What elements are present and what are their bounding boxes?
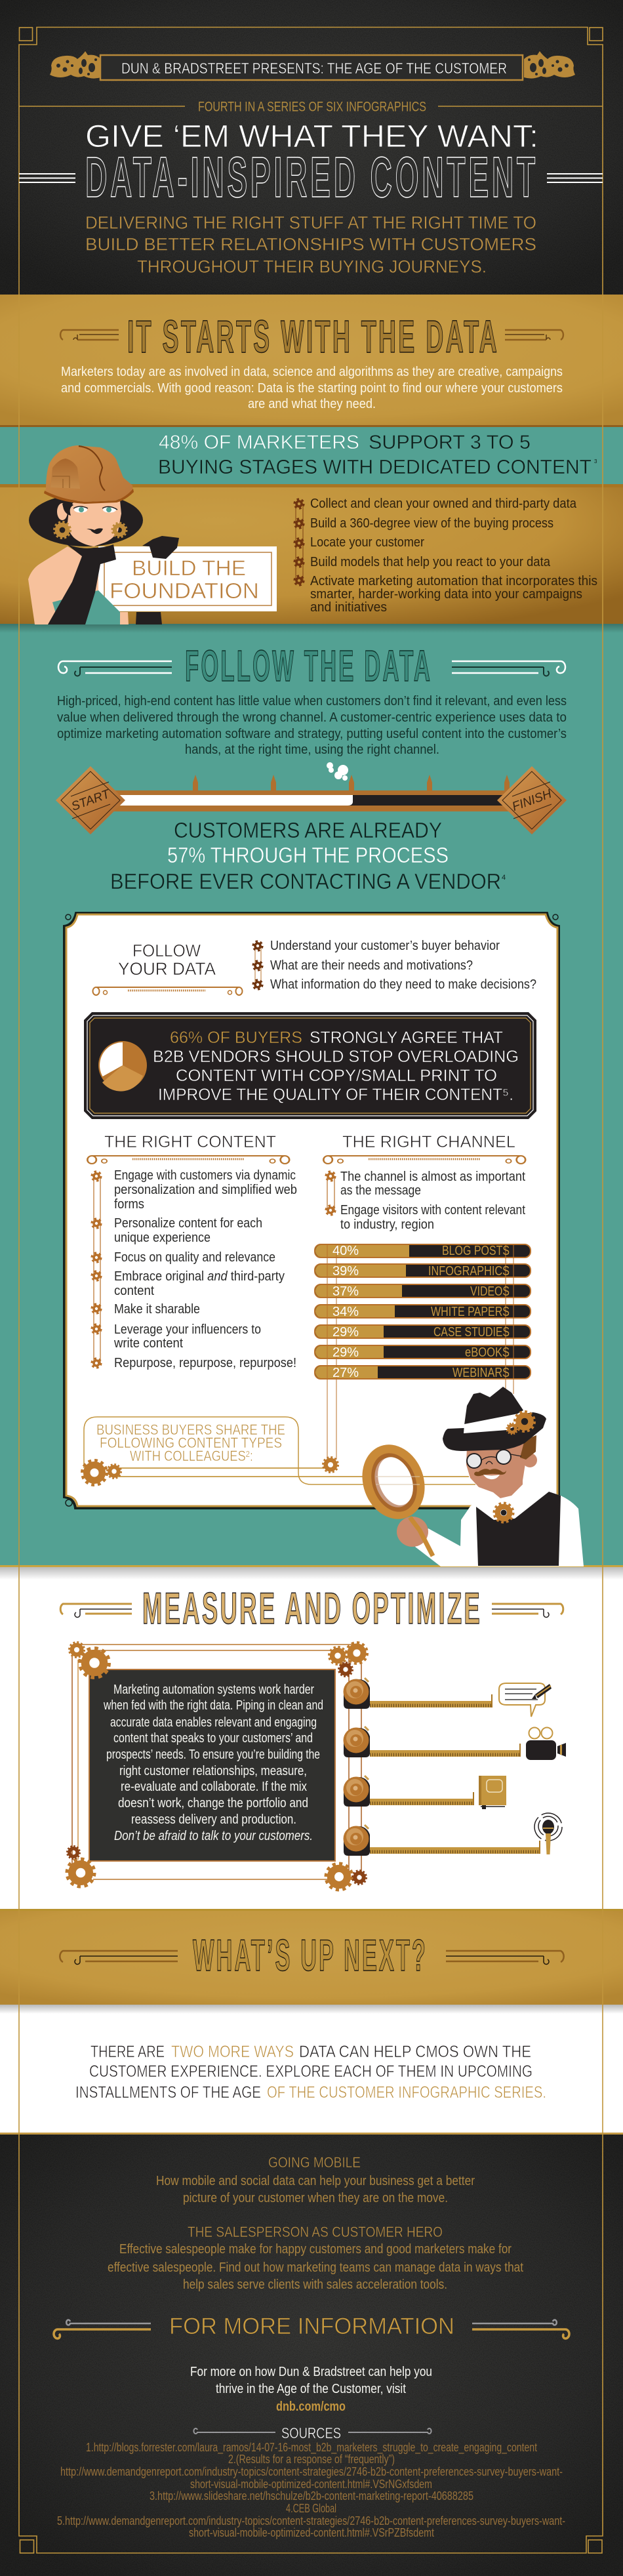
- banner ornament left: [50, 51, 101, 79]
- follow your data list: What are their needs and motivations?: [270, 958, 473, 973]
- hard hat: [44, 445, 134, 504]
- heading: for more information: [54, 2314, 569, 2339]
- progress track: start to finish: [56, 762, 567, 834]
- smoke puffs: [327, 762, 348, 781]
- pie chart: 66%: [98, 1041, 147, 1092]
- heading: sources: [193, 2424, 432, 2442]
- checklist: foundation steps: Locate your customer: [310, 535, 424, 550]
- blackboard text: accurate data enables relevant and engaging: [110, 1715, 317, 1730]
- finish diamond: FINISH: [510, 787, 553, 814]
- callout: business buyers share: WITH COLLEAGUES²:: [130, 1448, 253, 1464]
- connector lines: [327, 1244, 513, 1460]
- checklist: foundation steps: Activate marketing automation that incorporates this: [310, 574, 597, 588]
- upcoming: salesperson as customer hero: effective salespeople. Find out how marketing teams can manage data in ways that: [108, 2260, 523, 2275]
- intro text: Marketers today are as involved in data, science and algorithms as they are creative, campaigns: [61, 365, 563, 379]
- icon: speech bubble with pencil: [499, 1683, 552, 1717]
- column: the right channel: to industry, region: [340, 1217, 434, 1232]
- teaser text: INSTALLMENTS OF THE AGE: [75, 2083, 261, 2102]
- blackboard text: content that speaks to your customers’ and: [113, 1731, 313, 1746]
- callout: business buyers share: [83, 1417, 475, 1484]
- stat: 57% through the process: CUSTOMERS ARE ALREADY: [174, 818, 442, 842]
- heading scrolls: [60, 1604, 132, 1617]
- bar chart: content types shared: CASE STUDIES: [433, 1325, 510, 1339]
- sign: build the foundation: BUILD THE: [132, 556, 246, 580]
- start diamond: [56, 766, 125, 834]
- source list: [57, 2441, 565, 2539]
- stat: 48% of marketers: SUPPORT 3 TO 5: [369, 432, 531, 453]
- follow your data heading: FOLLOW: [132, 941, 201, 960]
- bar chart: content types shared: VIDEOS: [470, 1284, 510, 1299]
- sign: build the foundation: [98, 546, 277, 611]
- column: the right content: forms: [114, 1197, 144, 1212]
- eyes and lips: [73, 506, 117, 534]
- source list: 2.(Results for a response of “frequently”): [228, 2453, 395, 2466]
- title banner: [50, 51, 575, 80]
- illustration: woman with hard hat: [28, 445, 179, 624]
- bar chart: content types shared: WHITE PAPERS: [431, 1305, 510, 1319]
- blackboard: [89, 1669, 335, 1861]
- follow your data heading: [93, 941, 243, 995]
- source list: 3.http://www.slideshare.net/hschulze/b2b-content-marketing-report-40688285: [150, 2489, 473, 2503]
- column: the right channel: [323, 1133, 525, 1232]
- bar chart: content types shared: 40%: [332, 1244, 359, 1258]
- title banner: DUN & BRADSTREET PRESENTS: THE AGE OF THE CUSTOMER: [121, 60, 507, 77]
- frame gears: [68, 1643, 367, 1889]
- subtitle: THROUGHOUT THEIR BUYING JOURNEYS.: [137, 257, 487, 277]
- corner curls: [66, 914, 558, 1506]
- section: measure and optimize: [60, 1584, 566, 1889]
- column: the right content: [87, 1133, 297, 1370]
- more information text: For more on how Dun & Bradstreet can help you: [190, 2365, 432, 2379]
- column: the right channel: Engage visitors with content relevant: [340, 1203, 525, 1217]
- subtitle: BUILD BETTER RELATIONSHIPS WITH CUSTOMERS: [85, 235, 536, 255]
- teaser text: DATA CAN HELP CMOS OWN THE: [299, 2043, 531, 2061]
- bar chart: content types shared: eBOOKS: [465, 1345, 510, 1360]
- finish diamond: [497, 766, 567, 834]
- callout: 66% of buyers: [84, 1012, 536, 1119]
- intro text: [61, 365, 563, 411]
- intro text: [57, 694, 567, 757]
- column: the right content: Make it sharable: [114, 1302, 200, 1317]
- subtitle: DELIVERING THE RIGHT STUFF AT THE RIGHT TIME TO: [85, 213, 536, 232]
- blackboard text: doesn’t work, change the portfolio and: [118, 1796, 308, 1810]
- callout: 66% of buyers: IMPROVE THE QUALITY OF THEIR CONTENT⁵.: [158, 1086, 513, 1104]
- hat: [443, 1387, 546, 1451]
- subtitle: [85, 213, 536, 277]
- blackboard text: prospects’ needs. To ensure you’re building the: [106, 1748, 320, 1762]
- icon: film camera: [526, 1728, 566, 1760]
- bar chart: content types shared: 39%: [332, 1264, 359, 1278]
- checklist: foundation steps: Build a 360-degree view of the buying process: [310, 516, 553, 531]
- blackboard text: Marketing automation systems work harder: [113, 1683, 314, 1697]
- intro text: High-priced, high-end content has little value when customers don’t find it relevant, and even less: [57, 694, 567, 708]
- black mitten hand: [142, 536, 179, 559]
- blackboard text: Don’t be afraid to talk to your customers.: [114, 1829, 313, 1843]
- heading: for more information: FOR MORE INFORMATION: [169, 2314, 454, 2339]
- bar chart: content types shared: BLOG POSTS: [442, 1244, 510, 1258]
- source list: short-visual-mobile-optimized-content.html#.VSrNGxfsdem: [190, 2478, 432, 2491]
- column: the right channel: THE RIGHT CHANNEL: [342, 1133, 515, 1151]
- blackboard text: when fed with the right data. Piping in clean and: [103, 1698, 323, 1713]
- intro text: optimize marketing automation software and strategy, putting useful content into the customer’s: [57, 727, 567, 741]
- follow your data heading: YOUR DATA: [118, 959, 216, 979]
- shoulders and arm: [28, 546, 98, 624]
- main title: GIVE ‘EM WHAT THEY WANT:: [85, 119, 538, 154]
- source list: short-visual-mobile-optimized-content.html#.VSrPZBfsdemt: [189, 2526, 434, 2539]
- checklist: foundation steps: Collect and clean your owned and third-party data: [310, 497, 577, 511]
- gear frame lines: [72, 1645, 361, 1879]
- blackboard text: right customer relationships, measure,: [119, 1764, 307, 1778]
- blackboard text: re-evaluate and collaborate. If the mix: [121, 1780, 307, 1794]
- column: the right content: Engage with customers via dynamic: [114, 1168, 296, 1183]
- column: the right content: Leverage your influencers to: [114, 1322, 261, 1337]
- more information text: [190, 2365, 432, 2414]
- teaser text: TWO MORE WAYS: [171, 2043, 294, 2061]
- intro text: hands, at the right time, using the right channel.: [185, 743, 439, 757]
- column: the right content: Personalize content for each: [114, 1216, 262, 1231]
- follow your data list: Understand your customer’s buyer behavior: [270, 939, 500, 953]
- column: the right channel: The channel is almost as important: [340, 1170, 525, 1184]
- bar chart: content types shared: 37%: [332, 1284, 359, 1299]
- stat: 48% of marketers: 3: [594, 459, 597, 464]
- intro text: and commercials. With good reason: Data is the starting point to find our where your customers: [61, 381, 563, 396]
- stat: 48% of marketers: [158, 432, 597, 478]
- intro text: are and what they need.: [248, 397, 376, 411]
- source list: 4.CEB Global: [286, 2502, 336, 2515]
- section: what's up next: [60, 1931, 564, 1980]
- heading: sources: SOURCES: [281, 2424, 341, 2442]
- track ticks: [193, 775, 510, 790]
- upcoming: salesperson as customer hero: [108, 2224, 523, 2292]
- bar chart: content types shared: 27%: [332, 1366, 359, 1380]
- teaser text: THERE ARE: [90, 2043, 165, 2061]
- more information text: dnb.com/cmo: [276, 2400, 346, 2414]
- start diamond: START: [70, 787, 113, 814]
- main title: [19, 119, 603, 209]
- magnifying glass and hand: [352, 1436, 435, 1556]
- callout: 66% of buyers: B2B VENDORS SHOULD STOP OVERLOADING: [153, 1048, 519, 1066]
- section: it starts with the data: [60, 311, 563, 411]
- callout: business buyers share: BUSINESS BUYERS SHARE THE: [96, 1421, 285, 1438]
- icon: book: [479, 1776, 506, 1809]
- column: the right content: personalization and simplified web: [114, 1183, 297, 1197]
- section: follow the data: [57, 642, 567, 757]
- column: the right content: Embrace original and third-party: [114, 1269, 285, 1284]
- column: the right content: unique experience: [114, 1231, 211, 1245]
- blackboard text: [103, 1683, 323, 1843]
- teaser text: [75, 2043, 546, 2102]
- heading scrolls: [60, 1951, 178, 1964]
- column: the right channel: as the message: [340, 1183, 421, 1198]
- follow your data list: [253, 939, 536, 992]
- callout: business buyers share: FOLLOWING CONTENT TYPES: [100, 1435, 282, 1451]
- bar chart: content types shared: 34%: [332, 1305, 359, 1319]
- upcoming: salesperson as customer hero: help sales serve clients with sales acceleration tools.: [183, 2278, 447, 2292]
- checklist: foundation steps: [294, 497, 597, 615]
- stat: 57% through the process: 57% THROUGH THE PROCESS: [167, 843, 449, 867]
- callout: 66% of buyers: STRONGLY AGREE THAT: [310, 1029, 503, 1047]
- teaser text: OF THE CUSTOMER INFOGRAPHIC SERIES.: [267, 2083, 546, 2102]
- stat: 57% through the process: 4: [502, 874, 506, 882]
- icon: microphone: [534, 1813, 562, 1854]
- column: the right content: write content: [113, 1336, 183, 1351]
- checklist: foundation steps: Build models that help you react to your data: [310, 555, 551, 569]
- series label: FOURTH IN A SERIES OF SIX INFOGRAPHICS: [198, 100, 426, 114]
- bar chart: content types shared: 29%: [332, 1325, 359, 1339]
- column: the right content: content: [114, 1284, 154, 1298]
- checklist: foundation steps: smarter, harder-working data into your campaigns: [310, 587, 582, 602]
- black scarf: [48, 544, 116, 624]
- bar chart: content types shared: [315, 1244, 531, 1460]
- stat: 48% of marketers: 48% OF MARKETERS: [159, 432, 359, 453]
- heading scrolls: [58, 661, 172, 676]
- column: the right content: Focus on quality and relevance: [114, 1250, 275, 1265]
- callout: 66% of buyers: 66% OF BUYERS: [170, 1029, 302, 1047]
- bar chart: content types shared: WEBINARS: [452, 1366, 510, 1380]
- bar chart: content types shared: 29%: [332, 1345, 359, 1360]
- checklist: foundation steps: and initiatives: [310, 600, 387, 615]
- blackboard text: reassess delivery and production.: [131, 1812, 296, 1827]
- teal dress: [52, 590, 120, 624]
- gears: [83, 1458, 338, 1484]
- earrings: [54, 522, 127, 538]
- upcoming: going mobile: How mobile and social data can help your business get a better: [156, 2174, 475, 2188]
- teaser text: CUSTOMER EXPERIENCE. EXPLORE EACH OF THEM IN UPCOMING: [89, 2062, 533, 2081]
- intro text: value when delivered through the wrong channel. A customer-centric experience uses data to: [57, 710, 567, 725]
- more information text: thrive in the Age of the Customer, visit: [216, 2382, 406, 2396]
- column: the right content: THE RIGHT CONTENT: [104, 1133, 276, 1151]
- face: [68, 500, 121, 546]
- stat: 48% of marketers: BUYING STAGES WITH DEDICATED CONTENT: [158, 455, 592, 478]
- sign: build the foundation: FOUNDATION: [110, 579, 259, 603]
- follow your data list: What information do they need to make decisions?: [270, 977, 536, 992]
- bar chart: content types shared: INFOGRAPHICS: [428, 1264, 510, 1278]
- torso: [415, 1492, 584, 1566]
- upcoming: going mobile: picture of your customer when they are on the move.: [183, 2191, 448, 2205]
- upcoming: salesperson as customer hero: Effective salespeople make for happy customers and good marketers make for: [119, 2242, 512, 2257]
- illustration: detective with magnifying glass: [352, 1387, 584, 1566]
- heading scrolls: [60, 330, 119, 340]
- stat: 57% through the process: BEFORE EVER CONTACTING A VENDOR: [110, 869, 501, 893]
- panel: white content card: [64, 913, 559, 1508]
- stat: 57% through the process: [110, 818, 506, 893]
- upcoming: going mobile: GOING MOBILE: [268, 2154, 361, 2171]
- callout: 66% of buyers: CONTENT WITH COPY/SMALL PRINT TO: [176, 1067, 497, 1085]
- column: the right content: Repurpose, repurpose, repurpose!: [114, 1356, 296, 1370]
- upcoming: salesperson as customer hero: THE SALESPERSON AS CUSTOMER HERO: [188, 2224, 443, 2240]
- measuring tapes: [344, 1678, 540, 1856]
- upcoming: going mobile: [156, 2154, 475, 2205]
- head: [466, 1435, 537, 1498]
